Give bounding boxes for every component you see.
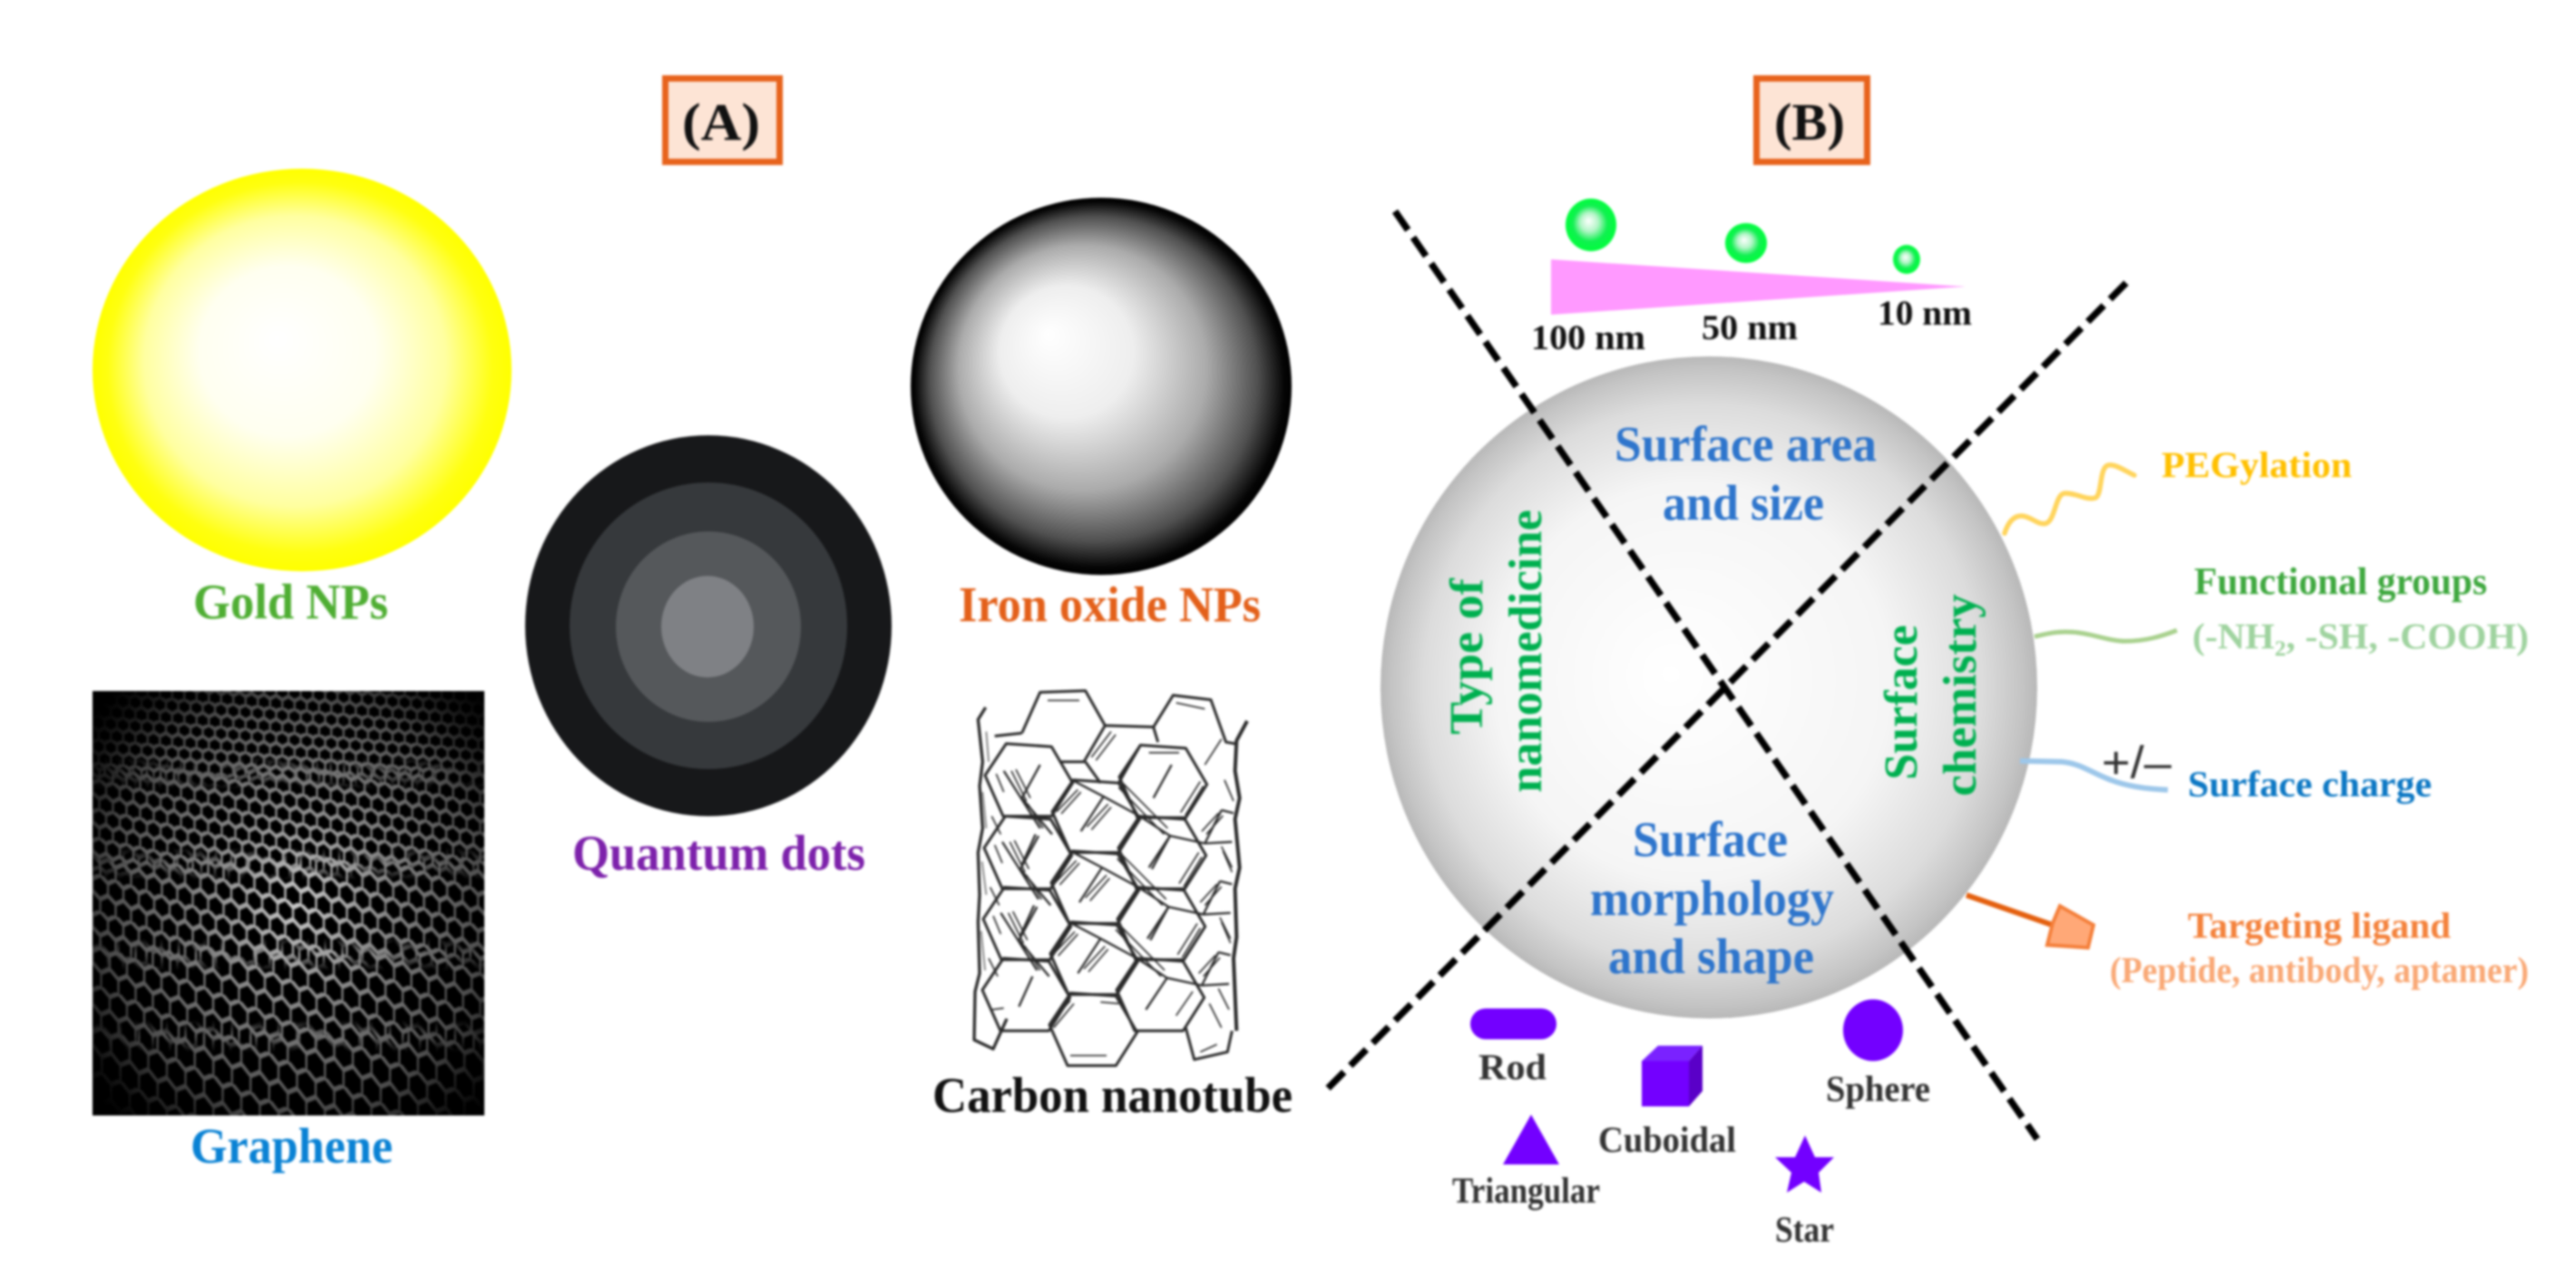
label: Rod: Rod <box>1478 1047 1547 1087</box>
label: 100 nm: 100 nm <box>1531 318 1645 357</box>
label: Targeting ligand: Targeting ligand <box>2188 905 2451 946</box>
functional groups connector wave <box>2034 630 2177 641</box>
text: Surface morphology and shape: and shape <box>1608 929 1814 984</box>
shape legend <box>1452 999 1930 1250</box>
text: Type of nanomedicine <box>1441 510 1552 793</box>
panel B: nanoparticle properties <box>1327 78 2529 1250</box>
icon: 10 nm sphere <box>1893 245 1920 274</box>
text: Surface morphology and shape <box>1590 812 1834 984</box>
icon: iron oxide nanoparticle sphere <box>911 198 1292 575</box>
icon: 50 nm sphere <box>1725 223 1767 263</box>
text: Type of nanomedicine: nanomedicine <box>1500 510 1552 793</box>
panel B label box <box>1756 78 1867 161</box>
PEGylation connector wave <box>2005 465 2134 533</box>
central grey nanoparticle sphere <box>1381 356 2037 1018</box>
icon: rod <box>1470 1008 1556 1039</box>
label: Star: Star <box>1775 1209 1834 1250</box>
icon: gold nanoparticle sphere <box>93 169 512 571</box>
label: Quantum dots: Quantum dots <box>572 825 865 881</box>
text: Surface chemistry: chemistry <box>1935 594 1986 796</box>
label: ligand examples: (Peptide, antibody, aptamer) <box>2110 950 2529 990</box>
panel A label box <box>666 78 780 161</box>
label: Cuboidal: Cuboidal <box>1598 1119 1736 1160</box>
label: Functional groups: Functional groups <box>2194 561 2487 603</box>
text: Surface chemistry <box>1876 594 1986 796</box>
text: Surface morphology and shape: morphology <box>1590 871 1834 926</box>
label: plus/minus charge: +/– <box>2102 737 2171 788</box>
label: Iron oxide NPs: Iron oxide NPs <box>959 577 1261 632</box>
label: PEGylation: PEGylation <box>2161 444 2352 485</box>
label: Graphene: Graphene <box>190 1118 393 1174</box>
text: Type of nanomedicine: Type of <box>1441 578 1493 735</box>
icon: 100 nm sphere <box>1566 199 1616 251</box>
icon: quantum dot concentric rings <box>525 435 892 816</box>
panel A label box: (A) <box>682 93 760 151</box>
icon: cuboid <box>1642 1046 1703 1106</box>
surface charge connector wave <box>2020 761 2168 790</box>
text: Surface area and size <box>1615 416 1877 531</box>
dashed dividing cross <box>1327 211 2126 1139</box>
label: 50 nm: 50 nm <box>1702 308 1798 347</box>
label: Gold NPs: Gold NPs <box>193 574 388 629</box>
text: Surface area and size: and size <box>1663 475 1824 531</box>
icon: sphere <box>1843 999 1903 1061</box>
text: Surface morphology and shape: Surface <box>1633 812 1788 867</box>
label: functional group examples: , -SH, -COOH) <box>2286 616 2529 657</box>
icon: carbon nanotube lattice <box>974 691 1247 1066</box>
icon: star <box>1775 1135 1834 1193</box>
label: Surface charge: Surface charge <box>2188 764 2432 804</box>
icon: graphene honeycomb sheet <box>93 667 484 1138</box>
size scale: spheres, wedge and labels <box>1531 199 1972 357</box>
label: Sphere: Sphere <box>1826 1068 1930 1109</box>
text: Surface area and size: Surface area <box>1615 416 1877 472</box>
label: 10 nm: 10 nm <box>1878 294 1972 333</box>
panel B label box: (B) <box>1774 93 1845 151</box>
label: functional group examples: (-NH <box>2192 616 2271 657</box>
label: Triangular: Triangular <box>1452 1170 1600 1211</box>
text: Surface chemistry: Surface <box>1876 625 1927 780</box>
size wedge <box>1551 259 1966 315</box>
label: functional group examples: 2 <box>2275 638 2286 661</box>
label: Carbon nanotube: Carbon nanotube <box>932 1067 1293 1123</box>
panel A: nanoparticle types <box>93 78 1293 1174</box>
icon: triangle <box>1503 1115 1559 1164</box>
targeting ligand arrow <box>1966 895 2093 948</box>
